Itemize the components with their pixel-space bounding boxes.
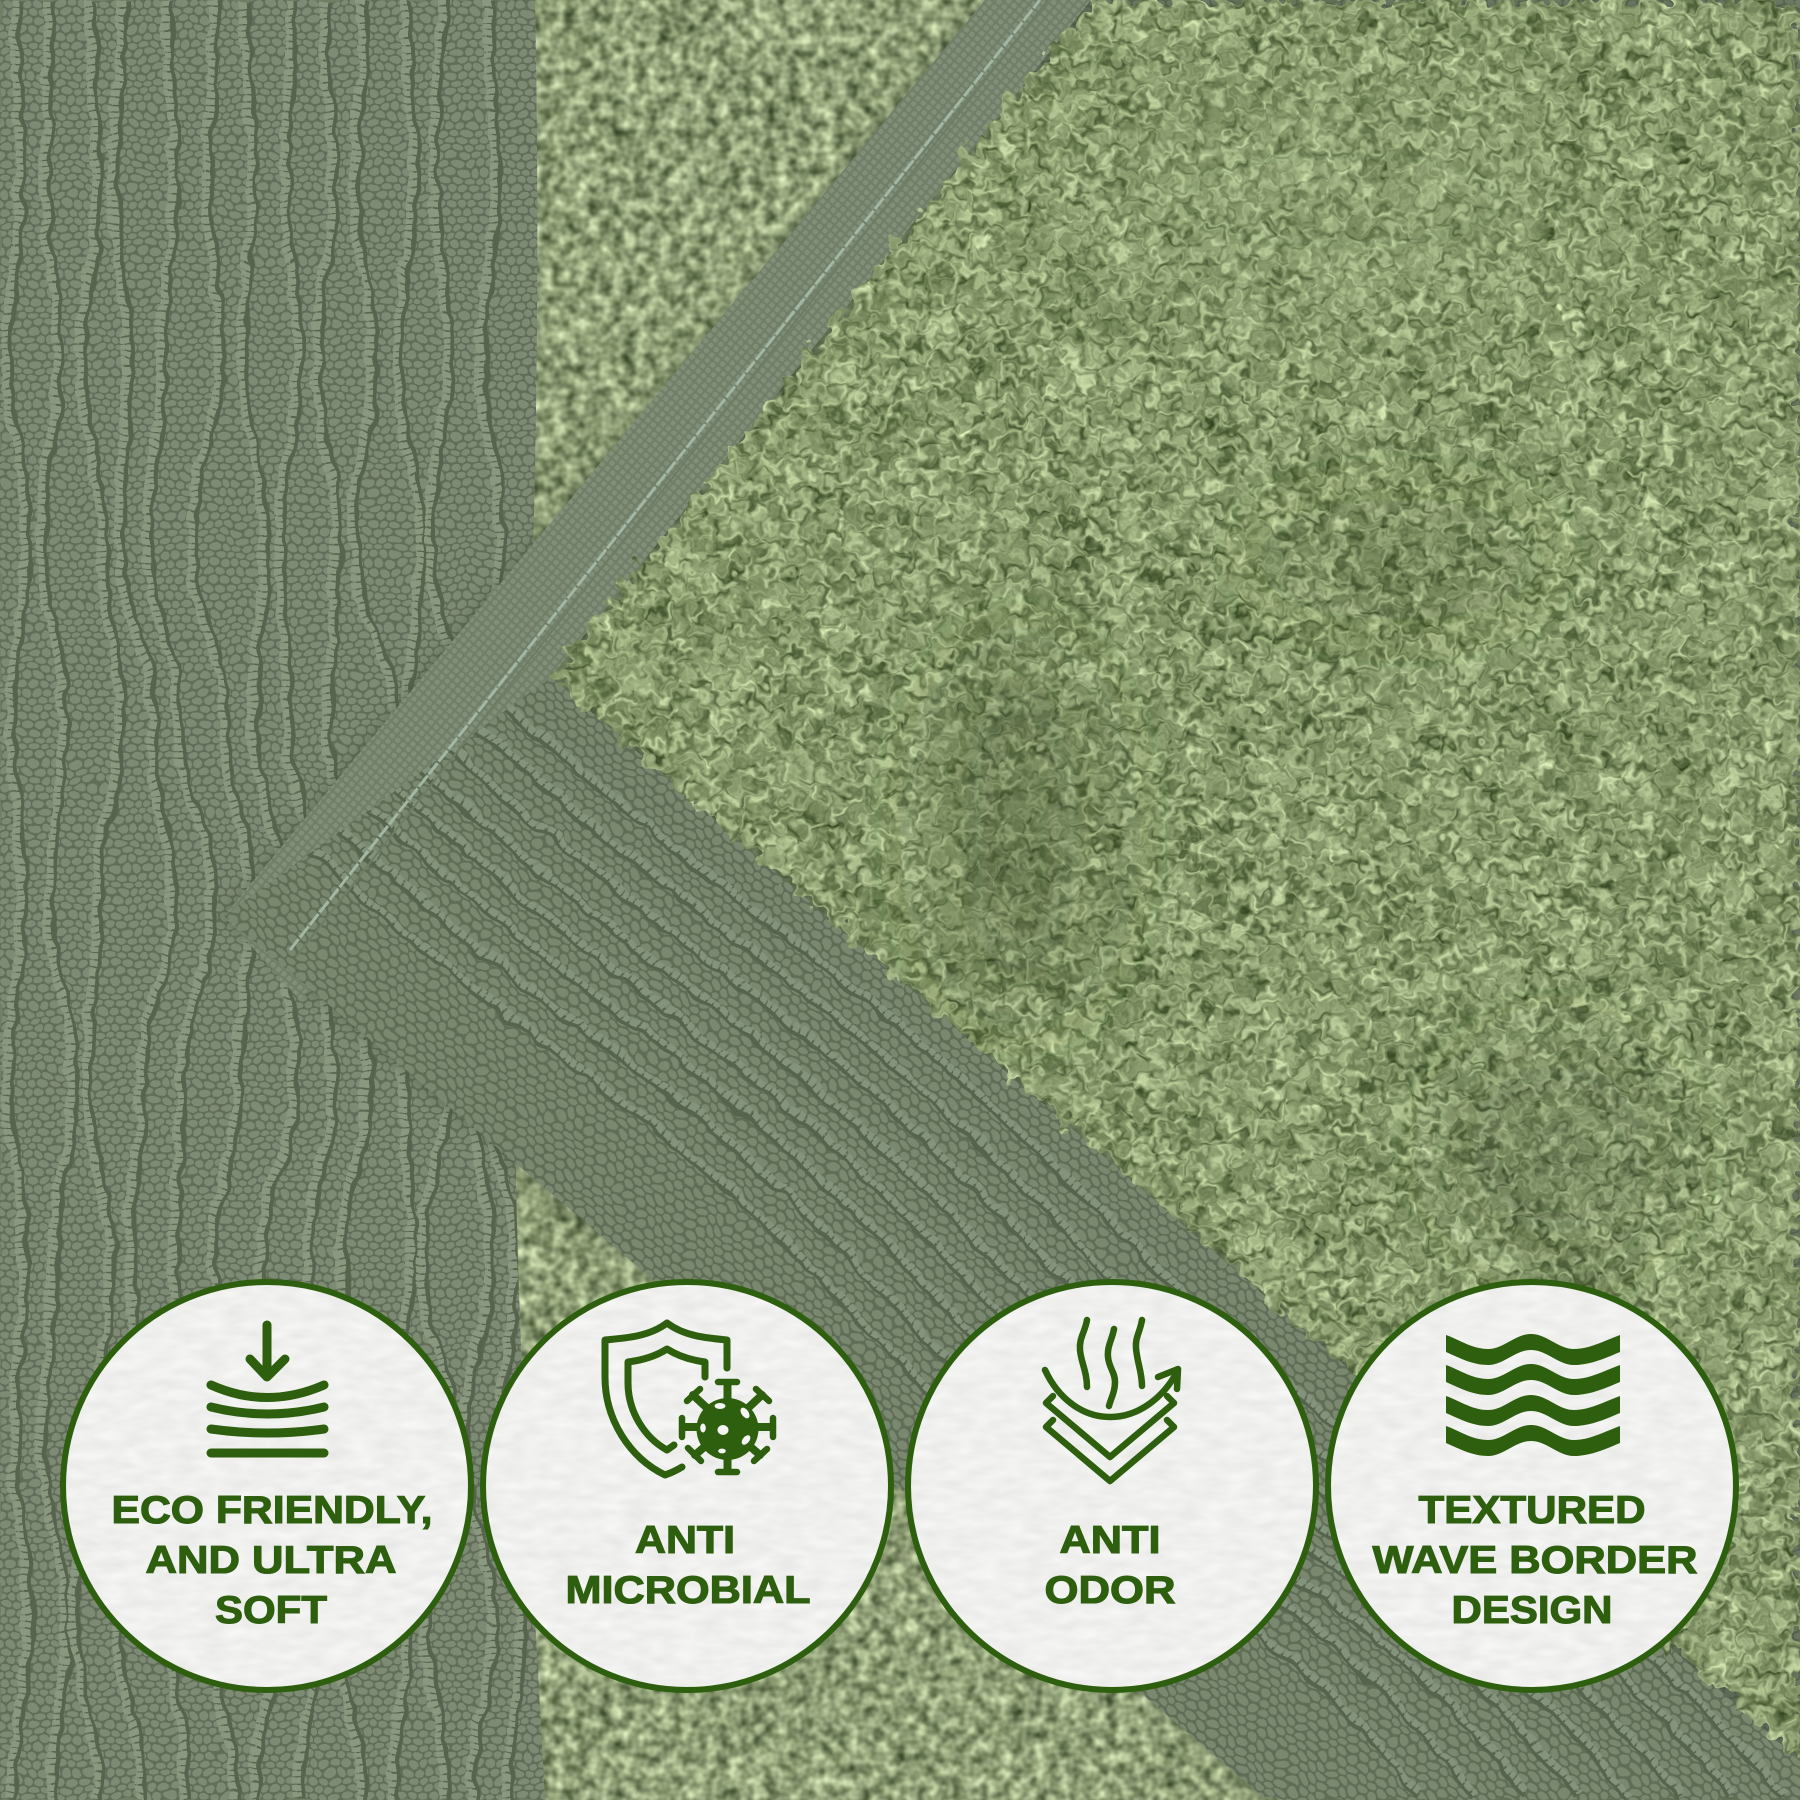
text: wave border label <box>1372 1489 1698 1632</box>
text: wave border label: WAVE BORDER <box>1372 1539 1698 1582</box>
icon: shield and virus <box>605 1323 773 1475</box>
terry pile <box>500 0 1800 1800</box>
photo background: terry pile under the folded towel <box>500 0 1300 1800</box>
text: wave border label: TEXTURED <box>1418 1489 1646 1532</box>
icon: odor vapor and towel layers <box>1045 1320 1178 1481</box>
text: anti odor label: ODOR <box>1044 1569 1176 1612</box>
text: anti microbial label <box>566 1519 810 1612</box>
badge: eco friendly and ultra soft <box>63 1282 471 1690</box>
badge: textured wave border design <box>1328 1282 1736 1690</box>
icon: arrow pressing soft layers <box>211 1325 324 1453</box>
hem fold <box>224 0 1091 1000</box>
dobby border band <box>224 678 1800 1800</box>
soft darker and lighter pile patches <box>930 80 1680 1270</box>
icon: four stacked waves <box>1446 1334 1620 1456</box>
text: anti microbial label: ANTI <box>635 1519 735 1562</box>
text: eco friendly label: ECO FRIENDLY, <box>112 1489 432 1532</box>
text: anti odor label <box>1044 1519 1176 1612</box>
circle row: white badge texture <box>50 1270 1750 1700</box>
stitched hem lines <box>290 0 1040 950</box>
text: eco friendly label: SOFT <box>215 1589 328 1632</box>
text: eco friendly label <box>112 1489 432 1632</box>
badge: anti odor <box>908 1282 1316 1690</box>
badge: anti microbial <box>483 1282 891 1690</box>
text: anti odor label: ANTI <box>1060 1519 1160 1562</box>
text: wave border label: DESIGN <box>1452 1589 1612 1632</box>
text: anti microbial label: MICROBIAL <box>566 1569 810 1612</box>
text: eco friendly label: AND ULTRA <box>146 1539 396 1582</box>
